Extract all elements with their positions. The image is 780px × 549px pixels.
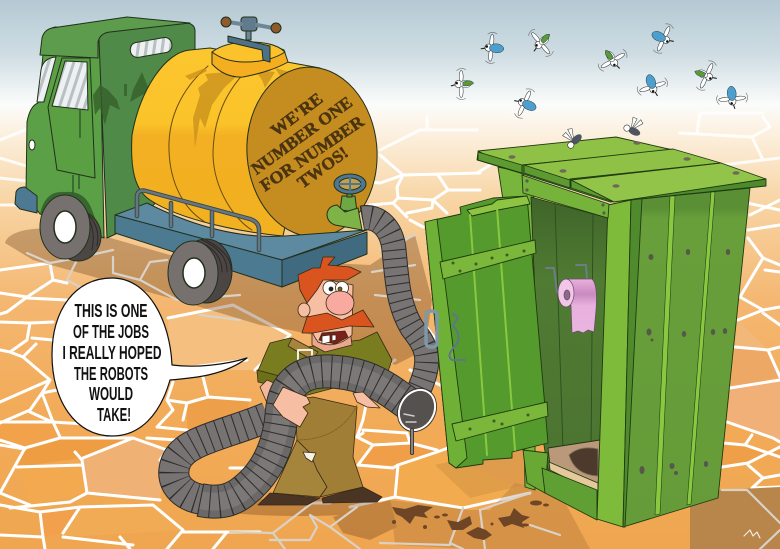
open door [425, 196, 548, 468]
moustache [302, 310, 374, 333]
hands [273, 387, 380, 427]
truck [15, 17, 383, 305]
corner post [597, 200, 631, 527]
fly on roof [623, 115, 646, 137]
tank dome [212, 42, 288, 77]
mud splats on ground [392, 500, 549, 540]
fly: green [451, 68, 474, 100]
nose [326, 291, 354, 315]
door handle [426, 311, 437, 347]
worker [257, 257, 392, 505]
hose: rear section to tap [362, 218, 427, 398]
tank slogan [248, 89, 368, 195]
tank slogan: FOR NUMBER [256, 111, 368, 195]
cab lamp [29, 140, 35, 150]
overalls: legs [273, 440, 327, 497]
tank slogan: NUMBER ONE [248, 93, 356, 179]
fly: blue [634, 70, 670, 101]
hose: main front section [200, 371, 417, 502]
cab side [99, 23, 195, 238]
toilet roll holder [546, 265, 587, 295]
corner post shade [623, 198, 642, 527]
speech text [62, 301, 162, 425]
fly: blue [480, 31, 505, 64]
forearm [260, 380, 300, 420]
door [48, 58, 95, 178]
valve on dome [221, 17, 281, 62]
speech text: WOULD [89, 384, 133, 404]
panel nails [640, 249, 730, 475]
hair [298, 257, 361, 303]
side window [129, 36, 173, 59]
tank body [132, 48, 320, 236]
tank band lines [169, 64, 253, 230]
door window [52, 61, 88, 110]
gap between legs [303, 452, 316, 462]
signature [744, 530, 760, 538]
toilet hole [569, 448, 598, 476]
safety rail [137, 191, 259, 250]
fly on roof [559, 125, 584, 150]
ear [298, 303, 310, 317]
speech text: THIS IS ONE [74, 301, 148, 321]
mouth [319, 331, 348, 344]
fly: blue [509, 85, 542, 123]
ground shadows [5, 228, 590, 549]
door hook [450, 314, 465, 360]
shadow cracks [27, 235, 780, 549]
speech bubble [52, 278, 247, 436]
hose mouth [390, 381, 444, 453]
buckle [298, 350, 312, 360]
outhouse ground shadow, lower right [690, 487, 780, 549]
fly: green [689, 56, 722, 94]
sleeve cuff [257, 370, 287, 388]
bumper [15, 187, 37, 213]
rear wheel [168, 239, 232, 305]
left wall [498, 167, 535, 490]
hose: back of loop [174, 417, 268, 500]
windshield [37, 57, 56, 102]
desert cell tones [0, 305, 780, 537]
flies [451, 19, 749, 150]
neck [312, 330, 352, 352]
tank slogan: TWOS! [294, 143, 352, 192]
front cab wheel tyre [40, 195, 101, 261]
grime on cab [72, 72, 150, 195]
speech text: I REALLY HOPED [62, 343, 162, 363]
roof [477, 137, 766, 202]
teeth [322, 335, 336, 344]
fly: green [523, 23, 560, 61]
seat [548, 440, 600, 488]
speech text: THE ROBOTS [74, 364, 148, 384]
wheel arch [40, 192, 102, 236]
eyes [323, 281, 337, 295]
seat front [549, 462, 598, 494]
outlet tap [327, 174, 366, 230]
front right panel [623, 188, 750, 527]
lintel nails [525, 179, 606, 215]
chassis platform [115, 203, 367, 287]
interior [531, 197, 608, 470]
lower door brace [452, 402, 548, 441]
upper door brace [440, 240, 536, 279]
strap [288, 338, 318, 360]
desert cracks [0, 113, 780, 549]
fly: green [593, 42, 631, 77]
tank stains [185, 68, 290, 148]
outhouse [425, 137, 766, 527]
base plank [523, 450, 548, 493]
tank end face [241, 63, 383, 241]
inner boards [555, 204, 593, 455]
fly: blue [646, 19, 679, 57]
lintel [522, 175, 609, 218]
fly: blue [716, 85, 749, 110]
tank slogan: WE'RE [267, 89, 326, 140]
toilet roll [558, 279, 596, 333]
speech text: OF THE JOBS [73, 322, 149, 342]
boots [258, 493, 320, 505]
shirt [257, 332, 392, 397]
overalls: bib curve [296, 405, 357, 440]
light board gaps [655, 192, 715, 515]
cab roof [40, 17, 190, 58]
cab front [26, 27, 104, 238]
speech text: TAKE! [97, 405, 131, 425]
head [298, 257, 374, 345]
threshold [542, 468, 597, 520]
